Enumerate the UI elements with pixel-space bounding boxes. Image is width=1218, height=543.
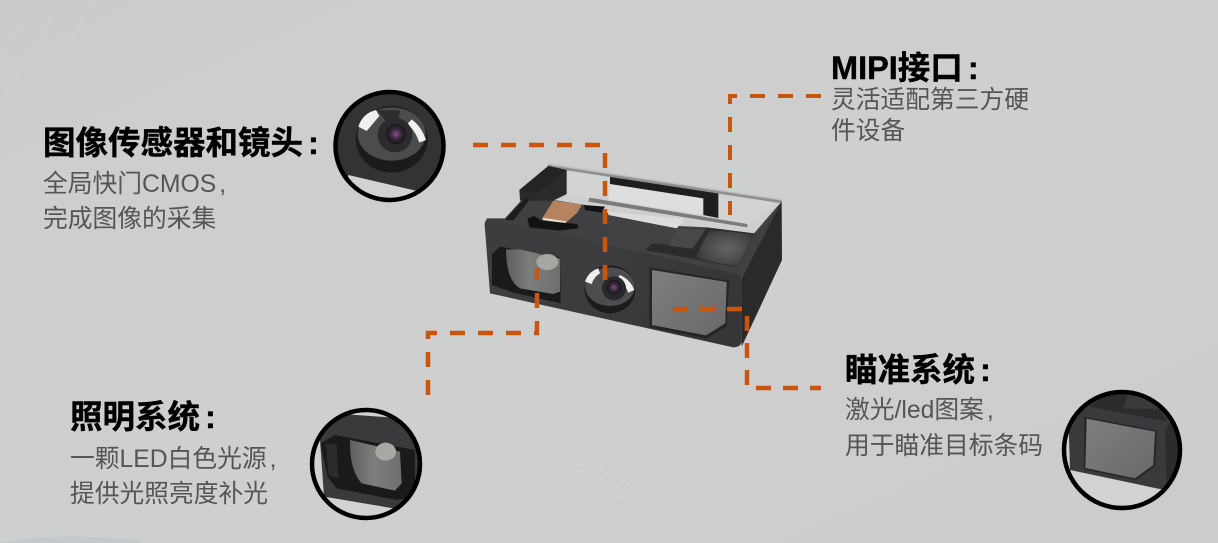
aiming window bbox=[649, 267, 729, 339]
description: illumination: 一颗LED白色光源, bbox=[70, 446, 277, 473]
description: aiming: 用于瞄准目标条码 bbox=[845, 433, 1043, 460]
description: sensor bbox=[43, 170, 226, 233]
top deck bbox=[487, 200, 782, 278]
description: sensor: 完成图像的采集 bbox=[43, 206, 216, 233]
side wall bbox=[742, 202, 782, 347]
connector: image sensor bbox=[473, 145, 605, 282]
description: aiming: 激光/led图案, bbox=[845, 397, 994, 424]
description: MIPI: 灵活适配第三方硬 bbox=[831, 87, 1029, 114]
heading: aiming: 瞄准系统: bbox=[845, 352, 991, 388]
description: aiming bbox=[845, 396, 1043, 460]
heading: illumination: 照明系统: bbox=[70, 399, 216, 435]
rear rail bbox=[547, 164, 782, 203]
connector: MIPI bbox=[730, 96, 821, 215]
left rear block bbox=[519, 166, 567, 201]
text block: MIPI bbox=[831, 50, 1029, 145]
description: illumination bbox=[70, 446, 277, 508]
interior seen through frame bbox=[567, 170, 610, 198]
description: sensor: 全局快门CMOS, bbox=[43, 171, 226, 198]
heading: MIPI: MIPI接口: bbox=[831, 50, 979, 86]
description: MIPI bbox=[831, 86, 1029, 145]
callout circle: LED lens bbox=[312, 410, 423, 518]
LED window bbox=[492, 247, 561, 303]
black rear bar bbox=[610, 177, 718, 218]
description: MIPI: 件设备 bbox=[831, 118, 905, 145]
flex cable bbox=[543, 201, 582, 223]
middle rail bbox=[588, 198, 747, 227]
callout circle: sensor lens bbox=[336, 92, 444, 220]
right recess bbox=[645, 227, 754, 267]
connector: illumination bbox=[428, 268, 537, 395]
front face bbox=[485, 218, 742, 347]
product: camera module bbox=[485, 163, 782, 347]
text block: aiming system bbox=[845, 352, 1043, 460]
description: illumination: 提供光照亮度补光 bbox=[70, 481, 268, 508]
callout circle: aiming window bbox=[1064, 390, 1183, 508]
text block: illumination system bbox=[70, 399, 277, 508]
text block: image sensor and lens bbox=[43, 125, 319, 233]
heading: sensor: 图像传感器和镜头: bbox=[43, 125, 319, 161]
connector: aiming bbox=[673, 309, 821, 388]
sensor lens bbox=[585, 265, 635, 313]
